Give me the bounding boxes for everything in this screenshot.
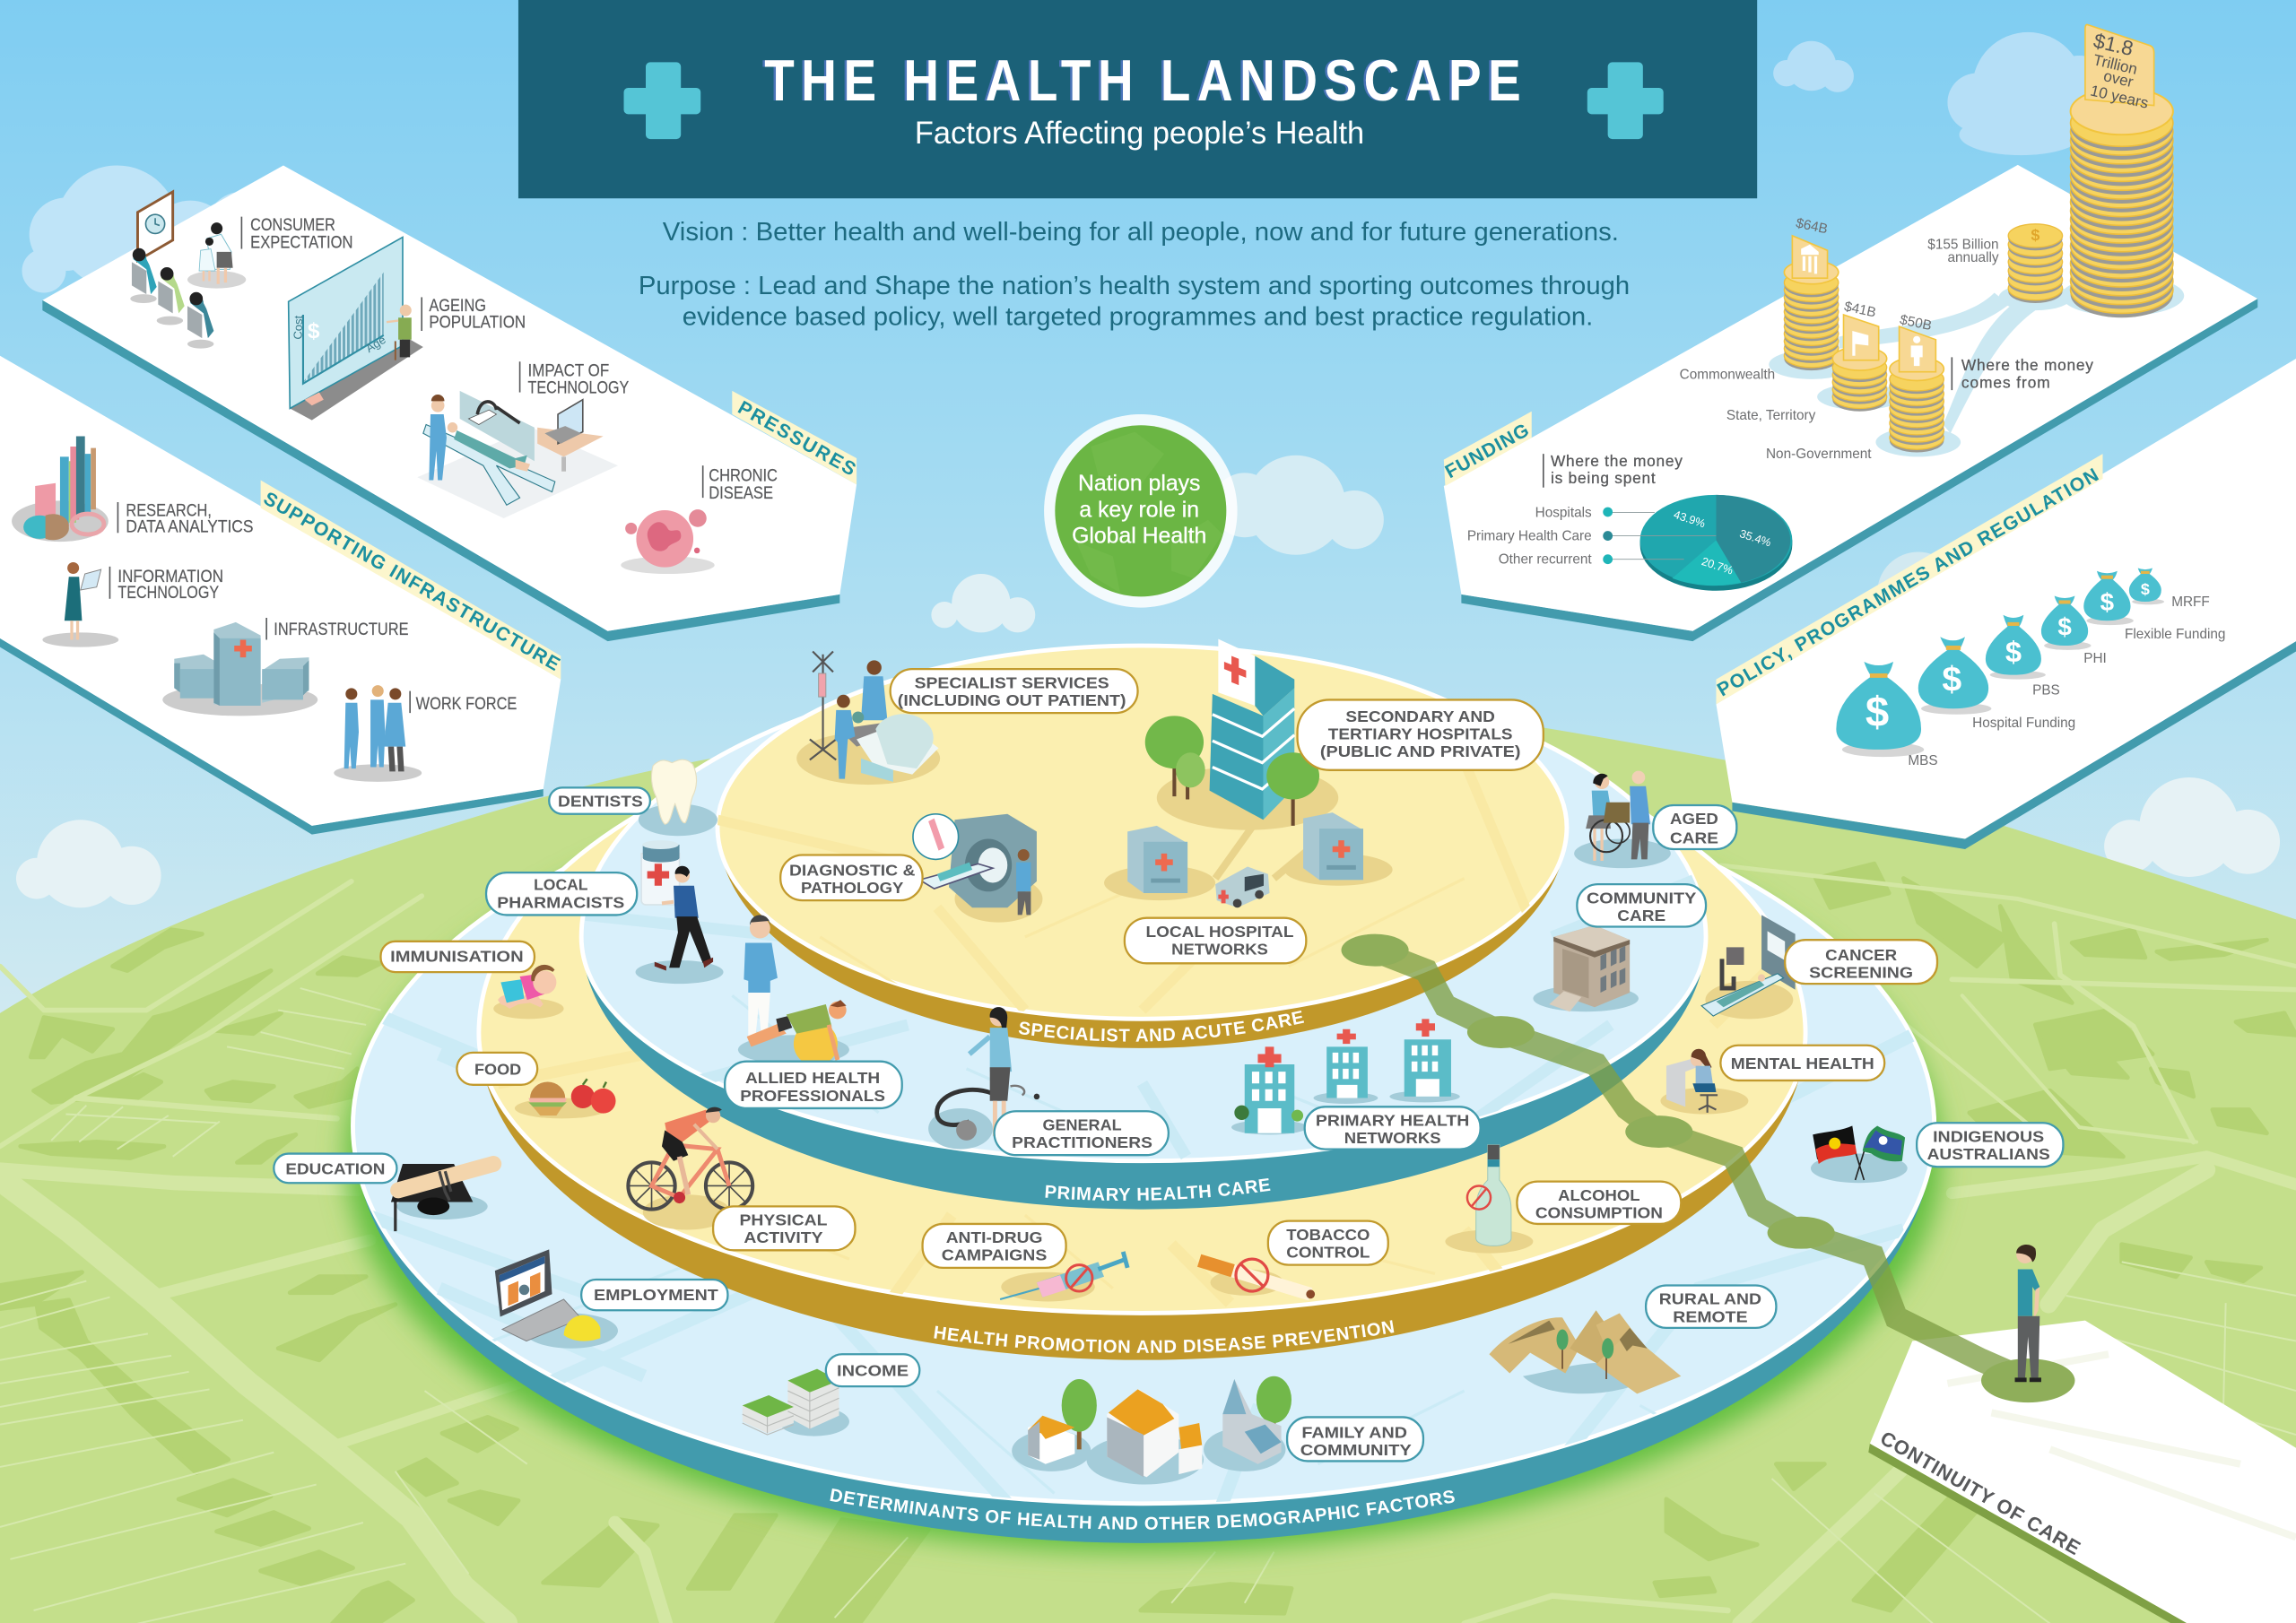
coin stack: 1.8 trillion: 10 years — [2089, 82, 2150, 112]
icon: food — [515, 1079, 616, 1118]
label: immunisation: IMMUNISATION — [390, 948, 524, 966]
label: rural and remote: RURAL AND — [1659, 1290, 1761, 1308]
label: impact of technology: TECHNOLOGY — [528, 378, 629, 397]
label: anti-drug campaigns: ANTI-DRUG — [946, 1228, 1042, 1246]
heading: supporting infrastructure: SUPPORTING INFRASTRUCTURE — [260, 488, 563, 675]
label: specialist services — [891, 669, 1138, 713]
coin stack: 1.8 trillion: $1.8 — [2092, 29, 2135, 60]
label: where the money is being spent: Where the money — [1551, 452, 1683, 470]
panel: policy, programmes and regulation — [1714, 359, 2296, 849]
header band — [518, 0, 1757, 198]
label: alcohol consumption — [1517, 1182, 1681, 1224]
label: dentists — [549, 787, 650, 814]
label: mental health — [1720, 1046, 1884, 1081]
label: family and community: FAMILY AND — [1301, 1423, 1407, 1441]
label: secondary and tertiary hospitals: SECONDARY AND — [1345, 707, 1495, 725]
ring label: determinants of health: DETERMINANTS OF HEALTH AND OTHER DEMOGRAPHIC FACTORS — [831, 1488, 1455, 1530]
title: THE HEALTH LANDSCAPE — [764, 47, 1521, 113]
pill labels: health promotion — [380, 940, 1937, 1268]
coin stack: 155 billion annually: annually — [1947, 250, 1999, 265]
pill labels: determinants of health — [274, 1123, 2063, 1461]
icon: money bag MBS — [1836, 662, 1938, 768]
label: community care: COMMUNITY — [1587, 889, 1697, 907]
pill labels: primary health care — [486, 787, 1736, 1155]
continuity of care walkway — [1868, 1321, 2296, 1623]
label: local pharmacists: LOCAL — [534, 876, 588, 894]
label: anti-drug campaigns: CAMPAIGNS — [942, 1246, 1048, 1264]
coin stack: state, territory 41B: $41B — [1843, 299, 1877, 320]
coin stack: 1.8 trillion: Trillion — [2092, 50, 2139, 78]
chart: ageing population — [289, 237, 423, 421]
heading: funding: FUNDING — [1442, 420, 1533, 482]
global health badge — [1044, 414, 1238, 608]
icon: local hospital buildings and ambulance — [1104, 812, 1393, 907]
icon: tobacco control — [1199, 1259, 1315, 1298]
icon: money bag PBS: PBS — [2032, 683, 2060, 699]
label: specialist services: SPECIALIST SERVICES — [915, 673, 1109, 691]
icon: family and community houses — [1012, 1376, 1292, 1485]
label: rural and remote: REMOTE — [1673, 1307, 1748, 1325]
icon: community care building — [1533, 925, 1639, 1011]
coin stack: commonwealth 64B — [1784, 215, 1839, 370]
coin stack: 1.8 trillion — [2071, 24, 2173, 317]
title shadow: THE HEALTH LANDSCAPE — [762, 47, 1518, 113]
label: income — [826, 1354, 919, 1386]
label: research, data analytics — [117, 501, 253, 536]
label: continuity of care: CONTINUITY OF CARE — [1876, 1427, 2084, 1559]
label: diagnostic and pathology — [780, 855, 923, 900]
label: indigenous australians: AUSTRALIANS — [1927, 1145, 2050, 1163]
panel: pressures — [42, 165, 859, 641]
icon: indigenous flags — [1811, 1126, 1908, 1183]
label: general practitioners — [995, 1111, 1169, 1155]
label: diagnostic and pathology: PATHOLOGY — [801, 879, 904, 897]
label: local hospital networks: LOCAL HOSPITAL — [1146, 923, 1294, 941]
pie chart: spending: 35.4% — [1738, 526, 1773, 550]
label: information technology: INFORMATION — [117, 567, 223, 586]
label: where the money comes from: Where the money — [1961, 356, 2093, 374]
label: family and community: COMMUNITY — [1300, 1441, 1412, 1459]
ring label: specialist and acute care: SPECIALIST AND ACUTE CARE — [1019, 1011, 1304, 1042]
icon: money bag hospital funding — [1918, 637, 2075, 731]
label: income: INCOME — [837, 1362, 909, 1380]
panel: funding — [1442, 24, 2257, 641]
icon: primary health network buildings — [1231, 1019, 1460, 1134]
icon: anti-drug syringe — [1000, 1252, 1127, 1301]
label: information technology — [109, 567, 223, 603]
icon: money bag PHI: PHI — [2083, 651, 2107, 666]
label: alcohol consumption: CONSUMPTION — [1535, 1203, 1663, 1221]
label: education — [274, 1154, 396, 1183]
icon: rural and remote mountains — [1489, 1310, 1681, 1393]
label: ageing population — [422, 296, 526, 333]
label: aged care: CARE — [1670, 829, 1718, 846]
label: mental health: MENTAL HEALTH — [1731, 1055, 1874, 1072]
subtitle: Factors Affecting people’s Health — [915, 116, 1364, 151]
pie chart: spending: Hospitals — [1535, 505, 1592, 520]
purpose statement: evidence based policy, well targeted programmes and best practice regulation. — [683, 302, 1593, 331]
coin stack: 155 billion annually: $ — [2031, 226, 2039, 244]
label: ageing population: POPULATION — [429, 313, 526, 333]
labels: funding sources: State, Territory — [1726, 408, 1816, 423]
global health badge: Nation plays — [1078, 472, 1200, 496]
global health badge: a key role in — [1079, 498, 1199, 522]
continuity of care path — [1342, 934, 2074, 1402]
icon: right cross — [1587, 62, 1664, 139]
label: chronic disease: DISEASE — [709, 483, 773, 503]
label: tobacco control: TOBACCO — [1286, 1226, 1370, 1244]
icon: money bag PBS — [1986, 615, 2060, 699]
label: information technology: TECHNOLOGY — [117, 583, 219, 603]
icon: information technology — [42, 562, 118, 647]
icon: infrastructure — [162, 622, 317, 716]
icon: general practitioner with stethoscope — [928, 1007, 1039, 1150]
icon: money bag MBS: $ — [1866, 689, 1889, 736]
label: secondary and tertiary hospitals: (PUBLIC AND PRIVATE) — [1320, 742, 1521, 760]
label: research, data analytics: RESEARCH, — [126, 501, 212, 521]
label: primary health networks: PRIMARY HEALTH — [1316, 1112, 1469, 1130]
label: diagnostic and pathology: DIAGNOSTIC & — [789, 861, 916, 879]
label: cancer screening — [1785, 940, 1937, 984]
label: allied health professionals — [725, 1062, 902, 1108]
label: secondary and tertiary hospitals: TERTIARY HOSPITALS — [1328, 725, 1513, 743]
label: where the money comes from: comes from — [1961, 374, 2050, 392]
chart: ageing population: $ — [308, 319, 320, 343]
labels: funding sources: Commonwealth — [1680, 367, 1775, 382]
icon: money bag PHI: $ — [2057, 613, 2072, 641]
label: tobacco control — [1268, 1221, 1388, 1265]
purpose statement: Purpose : Lead and Shape the nation’s health system and sporting outcomes through — [639, 272, 1630, 300]
icon: aged care — [1574, 771, 1671, 868]
label: physical activity: PHYSICAL — [739, 1211, 828, 1229]
pie chart: spending: Primary Health Care — [1467, 528, 1592, 543]
label: anti-drug campaigns — [923, 1224, 1066, 1268]
icon: tooth — [639, 759, 718, 836]
pie chart: spending: 20.7% — [1700, 554, 1735, 577]
icon: alcohol bottle with no sign — [1445, 1145, 1533, 1254]
icon: specialist services — [796, 652, 940, 785]
labels: funding sources — [1680, 367, 1872, 462]
label: chronic disease — [703, 465, 778, 503]
label: immunisation — [380, 942, 535, 972]
icon: mental health — [1660, 1049, 1748, 1114]
disc: health promotion — [477, 814, 1808, 1360]
icon: money bag MBS: MBS — [1908, 753, 1938, 768]
label: chronic disease: CHRONIC — [709, 465, 778, 485]
label: local pharmacists — [486, 872, 637, 915]
pie chart: spending: 43.9% — [1672, 508, 1707, 530]
disc: specialist and acute care — [718, 646, 1567, 1048]
icon: money bag MRFF — [2129, 568, 2210, 610]
ground: green map — [0, 706, 2296, 1623]
icon: local pharmacist — [636, 840, 724, 984]
label: where the money is being spent — [1544, 452, 1683, 488]
icon: money bag hospital funding: $ — [1942, 661, 1961, 699]
coin stack: 155 billion annually: $155 Billion — [1927, 238, 1999, 253]
ring label: health promotion and disease prevention: HEALTH PROMOTION AND DISEASE PREVENTION — [934, 1320, 1394, 1353]
label: work force: WORK FORCE — [416, 694, 517, 714]
label: where the money is being spent: is being spent — [1551, 469, 1656, 487]
label: food — [457, 1053, 537, 1085]
label: primary health networks: NETWORKS — [1344, 1129, 1441, 1147]
label: infrastructure: INFRASTRUCTURE — [274, 620, 409, 639]
icon: work force — [334, 685, 422, 782]
icon: immunisation baby — [493, 967, 564, 1019]
label: cancer screening: SCREENING — [1809, 964, 1913, 982]
icon: income money stacks — [743, 1369, 849, 1436]
label: aged care — [1653, 805, 1736, 849]
chart: ageing population: Age — [363, 333, 388, 355]
label: impact of technology: IMPACT OF — [528, 361, 609, 381]
icon: chronic disease — [621, 509, 715, 574]
label: physical activity — [713, 1206, 855, 1250]
label: local hospital networks — [1125, 918, 1306, 963]
coin stack: non-government 50B: $50B — [1899, 312, 1933, 334]
pie chart: spending — [1467, 495, 1792, 591]
label: indigenous australians: INDIGENOUS — [1933, 1127, 2044, 1145]
label: where the money comes from — [1952, 356, 2093, 392]
label: impact of technology — [520, 361, 629, 397]
icon: money bag flexible funding — [2083, 571, 2225, 642]
label: community care: CARE — [1617, 907, 1665, 924]
label: education: EDUCATION — [285, 1159, 385, 1177]
icon: person at start of care path — [2015, 1245, 2041, 1382]
label: general practitioners: GENERAL — [1042, 1115, 1122, 1133]
icon: money bag PHI — [2041, 596, 2107, 666]
pale money flow — [1769, 275, 2184, 456]
label: consumer expectation: CONSUMER — [250, 215, 335, 235]
heading: pressures: PRESSURES — [735, 397, 859, 480]
coin stack: commonwealth 64B: $64B — [1795, 215, 1829, 237]
label: alcohol consumption: ALCOHOL — [1558, 1186, 1640, 1204]
label: research, data analytics: DATA ANALYTICS — [126, 516, 253, 536]
heading: policy, programmes and regulation: POLICY, PROGRAMMES AND REGULATION — [1714, 464, 2102, 700]
label: dentists: DENTISTS — [558, 793, 643, 811]
icon: employment computer and helmet — [495, 1249, 618, 1349]
label: general practitioners: PRACTITIONERS — [1012, 1133, 1152, 1151]
label: ageing population: AGEING — [429, 296, 486, 316]
label: primary health networks — [1305, 1107, 1481, 1150]
label: community care — [1577, 884, 1706, 926]
label: consumer expectation — [241, 215, 352, 253]
panel: supporting infrastructure — [0, 356, 563, 835]
icon: impact of technology — [417, 391, 618, 518]
icon: physical activity cyclist — [628, 1107, 752, 1229]
coin stack: 1.8 trillion: over — [2102, 66, 2135, 91]
label: allied health professionals: ALLIED HEALTH — [745, 1069, 880, 1087]
icon: money bag flexible funding: Flexible Funding — [2125, 627, 2225, 642]
icon: cancer screening — [1701, 915, 1796, 1019]
icon: money bag flexible funding: $ — [2100, 588, 2115, 616]
label: employment — [581, 1280, 727, 1310]
label: cancer screening: CANCER — [1825, 946, 1897, 964]
label: local pharmacists: PHARMACISTS — [497, 893, 625, 911]
icon: money bag hospital funding: Hospital Funding — [1972, 716, 2075, 731]
label: consumer expectation: EXPECTATION — [250, 233, 352, 253]
label: indigenous australians — [1917, 1123, 2063, 1167]
pill labels: specialist and acute care — [780, 669, 1544, 963]
ring label: primary health care: PRIMARY HEALTH CARE — [1046, 1178, 1270, 1201]
icon: money bag MRFF: $ — [2141, 580, 2150, 598]
icon: allied health professionals — [738, 915, 849, 1066]
global health badge: Global Health — [1072, 525, 1206, 549]
icon: left cross — [624, 62, 700, 139]
icon: money bag PBS: $ — [2005, 635, 2022, 668]
icon: diagnostic and pathology — [913, 814, 1042, 923]
label: allied health professionals: PROFESSIONALS — [740, 1087, 885, 1105]
icon: secondary and tertiary hospital — [1145, 639, 1338, 830]
coin stack: 155 billion annually — [1927, 224, 2063, 303]
label: rural and remote — [1646, 1286, 1776, 1328]
vision statement: Vision : Better health and well-being for all people, now and for future generations. — [663, 218, 1619, 247]
label: physical activity: ACTIVITY — [744, 1228, 823, 1246]
icon: research, data analytics — [12, 437, 109, 542]
label: aged care: AGED — [1670, 810, 1718, 828]
label: local hospital networks: NETWORKS — [1171, 941, 1268, 959]
pie chart: spending: Other recurrent — [1499, 552, 1592, 568]
icon: money bag MRFF: MRFF — [2171, 595, 2210, 610]
label: specialist services: (INCLUDING OUT PATIENT) — [898, 691, 1126, 709]
label: tobacco control: CONTROL — [1286, 1243, 1370, 1261]
coin stack: state, territory 41B — [1832, 299, 1887, 412]
outer disc glow — [345, 761, 1942, 1552]
labels: funding sources: Non-Government — [1766, 447, 1872, 462]
chart: ageing population: Cost — [291, 315, 305, 340]
icon: education cap and diploma — [391, 1164, 493, 1231]
purpose statement — [639, 272, 1630, 331]
label: family and community — [1287, 1417, 1423, 1461]
coin stack: non-government 50B — [1890, 312, 1944, 453]
disc: primary health care — [581, 662, 1706, 1210]
disc: determinants of health — [351, 864, 1937, 1543]
icon: consumer expectation — [130, 192, 246, 349]
label: secondary and tertiary hospitals — [1298, 699, 1544, 770]
label: employment: EMPLOYMENT — [594, 1286, 718, 1304]
clouds — [16, 32, 2280, 907]
label: food: FOOD — [474, 1060, 521, 1078]
